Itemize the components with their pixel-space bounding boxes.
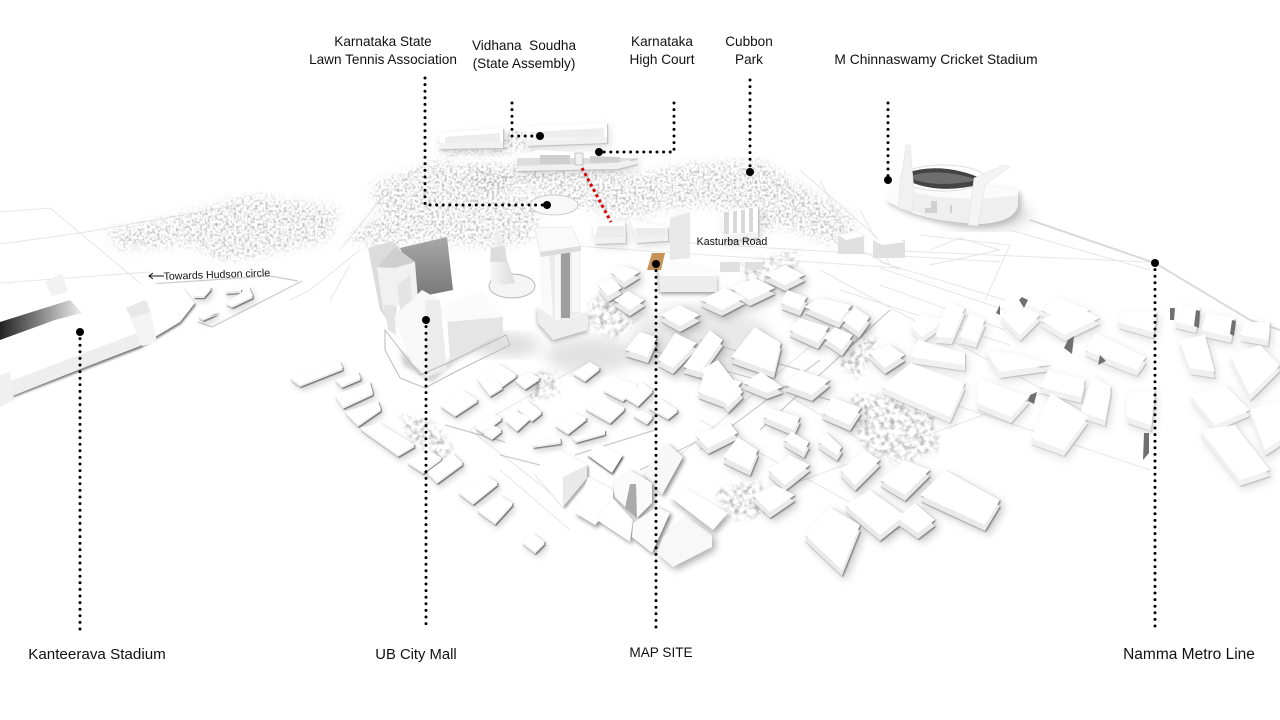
- leader: Chinnaswamy Stadium: [884, 103, 892, 184]
- label: Karnataka State Lawn Tennis Association: Karnataka State: [334, 34, 432, 49]
- road network: [0, 160, 1280, 530]
- leader: Map Site: [652, 260, 660, 630]
- label: Kanteerava Stadium: Kanteerava Stadium: [28, 646, 166, 663]
- buildings: east district: [881, 298, 1280, 480]
- buildings along Kasturba Road: [592, 206, 906, 292]
- panel: tower with circular base: [489, 223, 535, 298]
- far landmark: Karnataka State Lawn Tennis Association: [530, 195, 578, 215]
- leader: High Court: [595, 103, 674, 156]
- leader: Namma Metro Line: [1151, 259, 1159, 630]
- label: Vidhana Soudha (State Assembly): (State Assembly): [473, 56, 575, 71]
- label: Namma Metro Line: Namma Metro Line: [1123, 646, 1255, 663]
- label: Cubbon Park: Cubbon: [725, 34, 773, 49]
- tree clusters: [105, 130, 940, 520]
- ground shading: [470, 201, 1030, 375]
- panel: Kanteerava Stadium: [0, 273, 195, 407]
- buildings: south-central tall blocks: [533, 443, 728, 567]
- label: Vidhana Soudha (State Assembly): Vidhana Soudha: [472, 38, 576, 53]
- far landmark: Vidhana Soudha: [440, 123, 607, 143]
- leader: Cubbon Park: [746, 80, 754, 176]
- label: Karnataka High Court: High Court: [630, 52, 695, 67]
- leader: Vidhana Soudha: [512, 103, 544, 140]
- east dark slivers: [996, 297, 1236, 460]
- buildings: southwest blocks: [290, 362, 678, 552]
- red dotted link: [582, 168, 611, 222]
- buildings: central district: [598, 265, 1000, 570]
- leader: Kanteerava Stadium: [76, 328, 84, 630]
- label: UB City Mall: UB City Mall: [375, 647, 457, 663]
- panel: UB City Mall: [368, 237, 510, 388]
- label: M Chinnaswamy Cricket Stadium: M Chinnaswamy Cricket Stadium: [834, 52, 1038, 67]
- leader: UB City Mall: [422, 316, 430, 630]
- text: Kasturba Road: Kasturba Road: [697, 236, 767, 248]
- label: Karnataka High Court: Karnataka: [631, 34, 693, 49]
- small blocks near Hudson circle: [193, 287, 253, 319]
- label: Karnataka State Lawn Tennis Association: Lawn Tennis Association: [309, 52, 457, 67]
- map site plot: [647, 253, 665, 270]
- panel: M Chinnaswamy Cricket Stadium: [885, 145, 1018, 226]
- text: Towards Hudson circle: Towards Hudson circle: [163, 267, 270, 283]
- panel: high-rise tower: [535, 227, 588, 340]
- label: MAP SITE: MAP SITE: [629, 645, 693, 660]
- far landmark: Karnataka High Court: [517, 150, 638, 166]
- leader: Lawn Tennis Association: [425, 78, 551, 209]
- label: Cubbon Park: Park: [735, 52, 763, 67]
